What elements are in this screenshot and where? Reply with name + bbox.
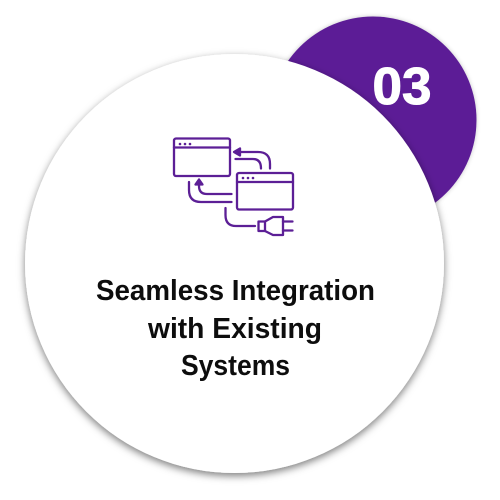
icon: second window [237,173,293,210]
connector: plug cable [226,208,255,226]
icon: plug [258,217,292,235]
purple number circle [270,16,476,224]
icon: first window [174,138,230,176]
number 03: 03 [372,58,432,116]
white main circle [25,54,444,473]
connector: left outer line [189,182,232,202]
title [96,275,375,382]
arrow: top return arrow [234,148,270,168]
connector: top inner line [236,159,261,168]
title line 3: Systems [181,350,290,382]
arrow: left return arrow [196,180,232,194]
icon: integration windows and plug [174,138,293,235]
title line 1: Seamless Integration [96,275,375,307]
title line 2: with Existing [147,313,322,345]
